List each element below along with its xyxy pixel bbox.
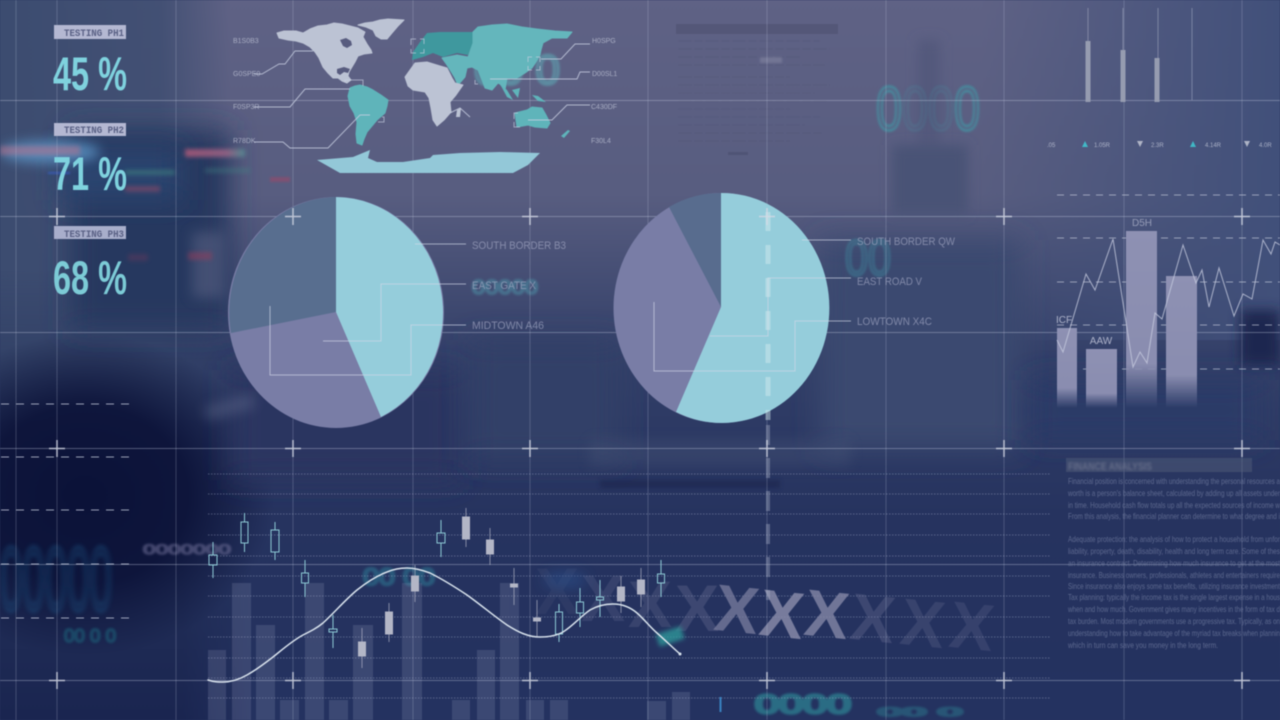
map labels: G0SPE0 (233, 71, 260, 78)
XXX ghost row: X (756, 575, 808, 653)
europe (412, 32, 473, 60)
indicator row: 4.0R (1259, 143, 1272, 149)
testing phase 1 (53, 25, 127, 100)
finance analysis text panel: which in turn can save you money in the long term. (1067, 640, 1218, 650)
filled candles (358, 508, 644, 668)
XXX ghost row: X (946, 587, 998, 665)
indicator row: 2.3R (1151, 143, 1164, 149)
map labels: R78DK (233, 138, 256, 145)
pie left connector lines (270, 244, 466, 375)
right bar and line chart (1056, 195, 1280, 408)
finance analysis text panel: FINANCE ANALYSIS (1068, 461, 1152, 473)
pie right labels: LOWTOWN X4C (857, 316, 932, 328)
slice: dark (229, 197, 336, 333)
XXX ghost row: X (711, 570, 763, 648)
document text block, faint (676, 24, 838, 155)
map labels: B1S0B3 (233, 38, 259, 45)
pie right connector lines (654, 240, 851, 371)
XXX ghost row: X (535, 554, 579, 628)
pie left labels: EAST GATE X (472, 280, 537, 292)
testing phase 3: TESTING PH3 (64, 230, 124, 241)
slice: light (336, 197, 443, 417)
australia (515, 107, 550, 128)
testing phase 1: TESTING PH1 (64, 29, 124, 40)
map labels: F0SP3R (233, 104, 259, 111)
map connector lines (254, 39, 590, 148)
XXX ghost row: X (581, 561, 625, 635)
testing phase 3: 68 % (53, 251, 127, 304)
ghost digit readouts: 00 0 (474, 46, 560, 93)
bars (1057, 231, 1197, 408)
pie left labels: MIDTOWN A46 (472, 320, 544, 332)
XXX ghost row: X (628, 567, 672, 641)
ghost digit readouts: 00 0 0 (64, 626, 116, 646)
bar labels: ICF (1056, 315, 1072, 326)
XXX ghost row: X (801, 575, 853, 653)
pie left labels: SOUTH BORDER B3 (472, 240, 566, 252)
testing phase 2 (53, 123, 127, 200)
ghost digit readouts: 00 (845, 230, 891, 286)
pie left labels (472, 240, 566, 332)
indicator row (1047, 141, 1272, 149)
trend curve (208, 568, 682, 682)
indicator row: 1.05R (1094, 143, 1111, 149)
dotted chart grid (208, 474, 1050, 698)
map labels (233, 38, 617, 145)
new zealand (561, 130, 570, 138)
candlestick chart (209, 508, 664, 668)
ghost digit readouts: 0000 (755, 689, 851, 719)
madagascar (456, 108, 461, 117)
pie right labels (857, 236, 956, 328)
slice: light (676, 193, 829, 423)
XXX ghost row: X (847, 579, 899, 657)
africa (405, 62, 463, 126)
map labels: H0SPG (592, 38, 616, 45)
ghost digit readouts: 00 0 (878, 705, 963, 719)
map labels: F30L4 (591, 138, 611, 145)
south america (348, 85, 388, 145)
testing phase 2: TESTING PH2 (64, 126, 124, 137)
pie chart: left (228, 197, 566, 428)
map labels: D00SL1 (592, 71, 617, 78)
bar labels: D5H (1132, 218, 1152, 229)
crosshair markers (49, 208, 1250, 689)
line (1057, 239, 1280, 367)
pie right labels: EAST ROAD V (857, 276, 923, 288)
XXX ghost row: X (897, 584, 949, 662)
greenland (358, 19, 404, 39)
testing phase 2: 71 % (53, 147, 127, 200)
indicator row: .05 (1047, 143, 1056, 149)
north america (277, 23, 372, 83)
left dashed rules (1, 404, 130, 618)
indicator row: 4.14R (1205, 143, 1222, 149)
bar labels (1056, 218, 1152, 347)
ghost digit readouts (0, 46, 980, 719)
map labels: C430DF (591, 104, 617, 111)
world map (233, 19, 617, 173)
pie right labels: SOUTH BORDER QW (857, 236, 956, 248)
panel: testing percentages (53, 25, 127, 304)
XXX ghost row: X (675, 571, 719, 645)
ghost digit readouts: 0000 (876, 75, 980, 144)
XXX ghost row (535, 554, 998, 665)
outlined candles (209, 513, 664, 648)
testing phase 1: 45 % (53, 47, 127, 100)
antarctica (317, 150, 540, 173)
bar labels: AAW (1090, 336, 1113, 347)
blurred accent marks (543, 571, 722, 712)
finance analysis text panel (1066, 458, 1280, 650)
ghost digit readouts: 0000000 (143, 541, 231, 557)
slice: dark (669, 193, 721, 307)
gulf of mexico (337, 67, 350, 75)
ghost digit readouts: 00000 (472, 277, 538, 299)
background bar chart (208, 583, 690, 720)
hudson bay (340, 38, 352, 48)
pie chart: right (614, 193, 956, 423)
vertical dashed scan line (766, 212, 770, 600)
top-right candle bars (1086, 8, 1192, 102)
indonesia islands (500, 84, 546, 102)
ghost digit readouts: 00000 (0, 530, 112, 630)
asia (442, 24, 572, 90)
ghost digit readouts: 00 00 (363, 564, 435, 591)
testing phase 3 (53, 226, 127, 304)
